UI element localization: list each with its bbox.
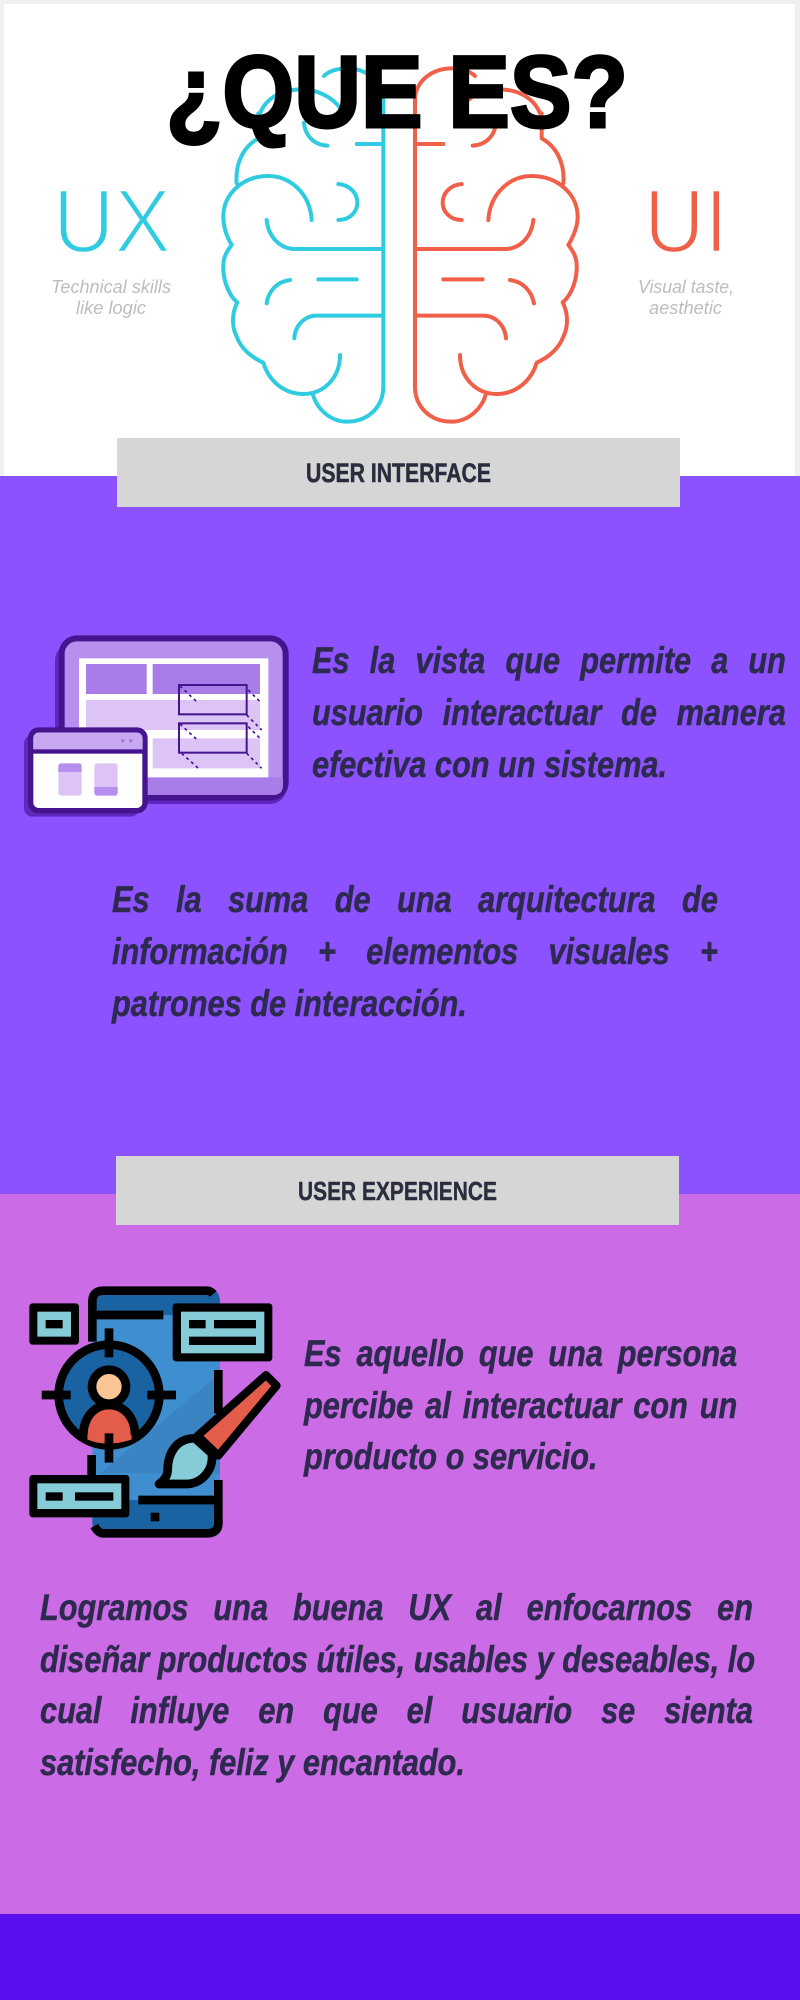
caption: UX skills [51,277,171,318]
heading: user experience: USER EXPERIENCE [298,1176,497,1206]
label: UX: UX [53,172,171,272]
heading: user interface [117,438,680,507]
left hemisphere [223,68,383,422]
icon: user experience phone and brush [29,1288,277,1535]
panel: white brain area [4,4,795,476]
illustration: brain [223,68,578,422]
heading: user interface: USER INTERFACE [306,458,491,488]
footer band [0,1914,800,2000]
heading: user experience [116,1156,679,1225]
text: UI definition: usuario interactuar de manera [312,692,786,733]
text: UI definition [312,640,786,785]
text: achieving good UX: Logramos una buena UX al enfocarnos en [40,1587,753,1628]
caption: UI taste [638,277,734,318]
text: UI definition: efectiva con un sistema. [312,744,667,785]
text: UX definition [303,1333,737,1477]
icon: interface screens [24,638,287,817]
text: UX definition: producto o servicio. [304,1436,598,1477]
text: achieving good UX [40,1587,755,1783]
text: UI composition: Es la suma de una arquitectura de [112,879,718,920]
text: UI composition [111,879,718,1024]
caption: UI taste: Visual taste, [638,277,734,297]
text: UI composition: patrones de interacción. [112,983,467,1024]
caption: UX skills: Technical skills [51,277,171,297]
label: UI: UI [644,172,728,272]
caption: UI taste: aesthetic [649,298,722,318]
text: UI definition: Es la vista que permite a un [312,640,786,681]
panel: user interface section [0,476,800,1194]
text: achieving good UX: diseñar productos útiles, usables y deseables, lo [40,1638,755,1680]
panel: user experience section [0,1194,800,1914]
text: UI composition: información + elementos visuales + [112,931,718,972]
title: ¿QUE ES? [166,35,628,149]
text: achieving good UX: satisfecho, feliz y encantado. [40,1742,465,1782]
text: UX definition: percibe al interactuar con un [304,1384,737,1426]
caption: UX skills: like logic [76,298,146,318]
right hemisphere [415,68,578,422]
text: UX definition: Es aquello que una persona [304,1333,737,1374]
text: achieving good UX: cual influye en que el usuario se sienta [40,1690,753,1731]
